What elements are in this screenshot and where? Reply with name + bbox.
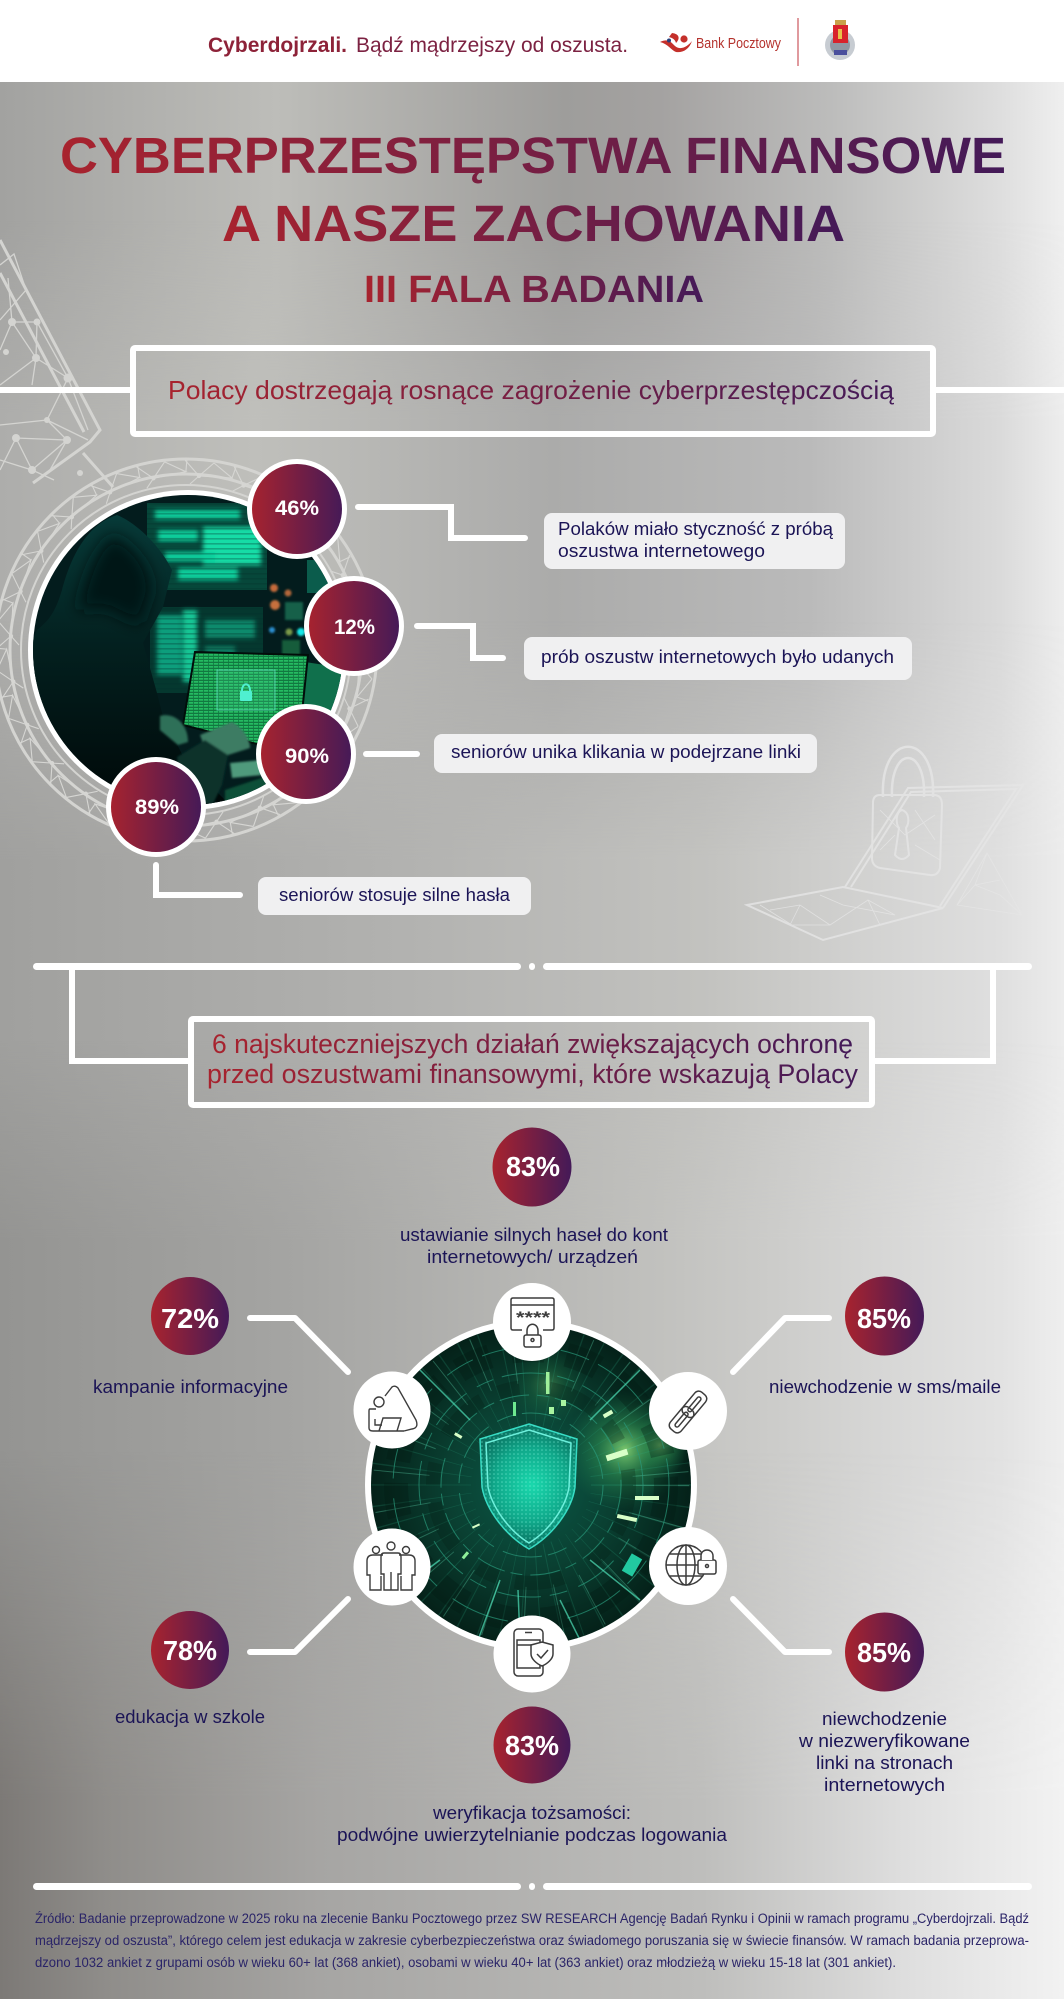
stat: 83% two-factor verification: 83% [505,1730,559,1761]
icon: password window with lock [493,1283,571,1361]
connector [156,865,240,895]
label: internetowych/ urządzeń [427,1247,638,1267]
heading text [207,1029,859,1089]
connector [733,1599,829,1652]
title: A NASZE ZACHOWANIA [222,195,845,252]
label [258,877,531,915]
hooded figure [33,515,230,805]
label [434,734,817,773]
programme slogan [208,34,628,57]
connector [366,751,417,757]
bracket lines [72,968,993,1061]
label: edukacja w szkole [115,1707,265,1727]
heading text: 6 najskuteczniejszych działań zwiększających ochronę [212,1029,853,1059]
label: w niezweryfikowane [798,1731,970,1751]
connector [358,507,525,538]
stat: 46% [250,462,845,569]
connector [733,1318,829,1372]
heading text: Polacy dostrzegają rosnące zagrożenie cyberprzestępczością [168,375,895,405]
stat: 72% campaigns [93,1277,430,1448]
label [400,1225,668,1267]
label: seniorów stosuje silne hasła [279,885,511,905]
top separator [33,963,1032,970]
decoration: wireframe padlock around the photo [0,240,382,847]
connector [417,626,503,658]
label: Polaków miało styczność z próbą [558,519,834,539]
icon: phone with shield [494,1616,570,1692]
bottom separator [33,1883,1032,1890]
hands and keyboard [160,715,270,804]
stat: 78% school education: 78% [163,1635,217,1666]
icon: person with laptop [354,1372,430,1448]
label [524,637,912,680]
stat: 85% unverified links [649,1527,970,1795]
label: niewchodzenie [822,1709,947,1729]
central image: digital shield [365,1319,697,1651]
stat: 83% strong passwords [400,1128,668,1361]
source note: mądrzejszy od oszusta”, którego celem jest edukacja w zakresie cyberbezpieczeństwa oraz świadomego poruszania się w świecie finansów. W ramach badania przeprowa- [35,1933,1029,1948]
label: seniorów unika klikania w podejrzane linki [451,742,801,762]
label: niewchodzenie w sms/maile [769,1377,1001,1397]
stat: 72% campaigns: 72% [161,1303,219,1334]
heading frame [133,348,933,434]
programme slogan: Cyberdojrzali. [208,34,347,57]
label [337,1803,728,1845]
label: podwójne uwierzytelnianie podczas logowania [337,1825,728,1845]
stat: 12%: 12% [334,616,375,639]
label: kampanie informacyjne [93,1377,288,1397]
source note: dzono 1032 ankiet z grupami osób w wieku 60+ lat (368 ankiet), osobami w wieku 40+ lat (363 ankiet) oraz młodzieżą w wieku 15-18 lat (301 ankiet). [35,1955,896,1970]
panel: threat awareness heading [0,348,1064,434]
connector [250,1318,348,1372]
stat: 78% school education [115,1528,430,1727]
stat: 85% not opening sms/mail [649,1276,1001,1450]
decoration: wireframe laptop and padlock [747,747,1023,940]
logo: Bank Pocztowy: Bank Pocztowy [696,35,781,52]
logo: Bank Pocztowy [660,33,781,52]
programme slogan: Bądź mądrzejszy od oszusta. [356,34,628,57]
stat: 12% [306,578,912,680]
title: CYBERPRZESTĘPSTWA FINANSOWE [60,127,1006,184]
logo divider [798,18,799,66]
stat: 89% [108,760,531,915]
source note [35,1911,1029,1970]
stat: 89%: 89% [135,796,179,819]
stat: 90%: 90% [285,745,329,768]
logo: coat of arms [825,20,855,60]
connector [250,1599,348,1652]
label: weryfikacja tożsamości: [432,1803,631,1823]
source note: Źródło: Badanie przeprowadzone w 2025 roku na zlecenie Banku Pocztowego przez SW RESEARCH Agencję Badań Rynku i Opinii w ramach programu „Cyberdojrzali. Bądź [35,1911,1029,1926]
stat: 85% not opening sms/mail: 85% [857,1303,911,1334]
laptop screen [183,652,308,744]
bright light streaks [454,1372,659,1559]
label: ustawianie silnych haseł do kont [400,1225,668,1245]
stat: 83% two-factor verification [337,1616,728,1845]
label [798,1709,970,1795]
subtitle: III FALA BADANIA [364,269,704,311]
label: internetowych [824,1775,945,1795]
title [60,127,1006,311]
label: oszustwa internetowego [558,541,765,561]
stat: 85% unverified links: 85% [857,1637,911,1668]
icon: group of people [354,1528,430,1606]
icon: globe with lock [649,1527,727,1605]
panel: protective actions heading [33,963,1032,1105]
shield [480,1424,577,1549]
stat: 90% [258,706,817,802]
heading frame [191,1019,872,1105]
icon: password window with lock: **** [516,1308,550,1327]
icon: chain link [649,1372,727,1450]
header bar [0,0,1064,82]
photo: hacker at a laptop [28,490,348,810]
label: linki na stronach [816,1753,953,1773]
heading connector lines [0,387,1064,393]
label [544,513,845,569]
stat: 83% strong passwords: 83% [506,1151,560,1182]
heading text: przed oszustwami finansowymi, które wskazują Polacy [207,1059,859,1089]
label: prób oszustw internetowych było udanych [541,647,894,667]
stat: 46%: 46% [275,497,319,520]
